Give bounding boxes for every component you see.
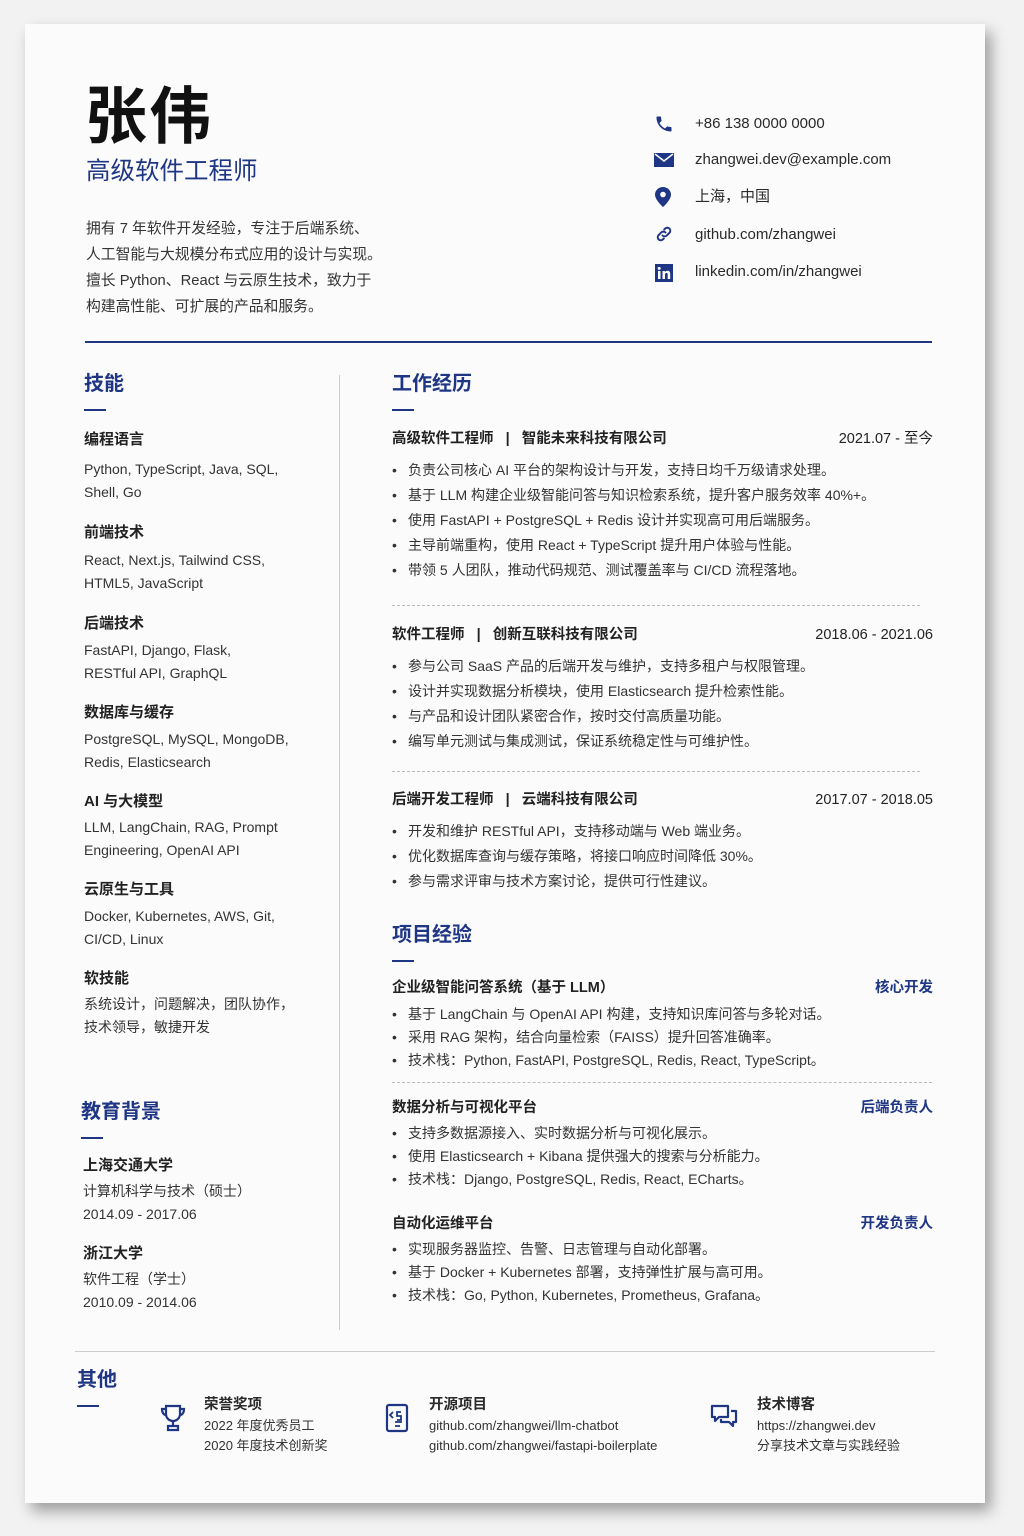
- panel: skills: HTML5, JavaScript: [84, 575, 203, 591]
- icon: trophy: [160, 1404, 186, 1432]
- panel: projects: 后端负责人: [860, 1100, 933, 1116]
- panel: education: 2014.09 - 2017.06: [83, 1206, 197, 1222]
- panel: projects: [392, 924, 933, 1303]
- panel: skills: 技术领导，敏捷开发: [84, 1019, 210, 1035]
- panel: skills: CI/CD, Linux: [84, 931, 163, 947]
- panel: skills: PostgreSQL, MySQL, MongoDB,: [84, 731, 289, 747]
- text: honors: [204, 1396, 328, 1453]
- panel: projects: 企业级智能问答系统（基于 LLM）: [392, 980, 614, 996]
- text: open source: [429, 1396, 657, 1453]
- panel: skills: LLM, LangChain, RAG, Prompt: [84, 819, 278, 835]
- panel: projects: 开发负责人: [860, 1216, 933, 1232]
- panel: education: 浙江大学: [83, 1245, 143, 1262]
- panel: work experience: [392, 372, 933, 889]
- panel: skills: Python, TypeScript, Java, SQL,: [84, 461, 278, 477]
- panel: work experience: 带领 5 人团队，推动代码规范、测试覆盖率与 CI/CD 流程落地。: [408, 562, 805, 578]
- contact list: zhangwei.dev@example.com: [695, 151, 891, 168]
- text: blog: 分享技术文章与实践经验: [757, 1438, 900, 1453]
- panel: projects: 技术栈：Go, Python, Kubernetes, Prometheus, Grafana。: [408, 1287, 769, 1303]
- panel: work experience: 优化数据库查询与缓存策略，将接口响应时间降低 30%。: [408, 848, 762, 864]
- heading: projects: 项目经验: [392, 924, 472, 946]
- contact list: github.com/zhangwei: [695, 226, 836, 243]
- panel: work experience: 开发和维护 RESTful API，支持移动端与 Web 端业务。: [408, 823, 750, 839]
- text: honors: 2022 年度优秀员工: [204, 1418, 315, 1433]
- panel: work experience: 主导前端重构，使用 React + TypeScript 提升用户体验与性能。: [408, 537, 800, 553]
- panel: skills: 编程语言: [84, 431, 144, 448]
- contact list: linkedin.com/in/zhangwei: [695, 263, 862, 280]
- text: blog: 技术博客: [757, 1397, 815, 1413]
- panel: skills: Shell, Go: [84, 484, 142, 500]
- panel: projects: 基于 Docker + Kubernetes 部署，支持弹性扩展与高可用。: [408, 1264, 772, 1280]
- heading: education: 教育背景: [81, 1101, 161, 1123]
- summary: [86, 220, 382, 315]
- panel: projects: 技术栈：Python, FastAPI, PostgreSQL, Redis, React, TypeScript。: [408, 1052, 825, 1068]
- panel: education: [81, 1100, 251, 1310]
- text: blog: [757, 1396, 900, 1453]
- text: open source: 开源项目: [429, 1397, 487, 1413]
- panel: skills: 云原生与工具: [84, 881, 174, 898]
- panel: projects: 核心开发: [875, 980, 933, 996]
- icon: mail: [654, 153, 674, 167]
- panel: others: [77, 1369, 900, 1453]
- panel: work experience: 编写单元测试与集成测试，保证系统稳定性与可维护性。: [408, 733, 758, 749]
- panel: skills: RESTful API, GraphQL: [84, 665, 227, 681]
- panel: education: 2010.09 - 2014.06: [83, 1294, 197, 1310]
- panel: work experience: 软件工程师 | 创新互联科技有限公司: [392, 627, 638, 643]
- job title: 高级软件工程师: [86, 158, 258, 185]
- panel: skills: 软技能: [84, 970, 129, 987]
- panel: skills: [84, 372, 294, 1035]
- panel: work experience: 与产品和设计团队紧密合作，按时交付高质量功能。: [408, 708, 730, 724]
- panel: work experience: 2018.06 - 2021.06: [815, 627, 933, 643]
- text: blog: https://zhangwei.dev: [757, 1418, 876, 1433]
- panel: skills: React, Next.js, Tailwind CSS,: [84, 552, 265, 568]
- panel: projects: 使用 Elasticsearch + Kibana 提供强大的搜索与分析能力。: [408, 1148, 769, 1164]
- icon: linkedin: [655, 264, 673, 282]
- panel: work experience: 设计并实现数据分析模块，使用 Elasticsearch 提升检索性能。: [408, 683, 793, 699]
- panel: projects: 技术栈：Django, PostgreSQL, Redis, React, ECharts。: [408, 1171, 753, 1187]
- panel: skills: Docker, Kubernetes, AWS, Git,: [84, 908, 275, 924]
- panel: skills: 后端技术: [84, 615, 144, 632]
- panel: work experience: 使用 FastAPI + PostgreSQL + Redis 设计并实现高可用后端服务。: [408, 512, 819, 528]
- panel: projects: 自动化运维平台: [392, 1216, 494, 1232]
- icon: pin: [655, 187, 671, 207]
- panel: skills: AI 与大模型: [84, 793, 163, 810]
- name: 张伟: [85, 83, 213, 152]
- panel: work experience: 参与需求评审与技术方案讨论，提供可行性建议。: [408, 873, 716, 889]
- icon: phone: [656, 116, 672, 132]
- panel: education: 计算机科学与技术（硕士）: [83, 1183, 251, 1199]
- contact list: 上海，中国: [695, 188, 770, 205]
- panel: work experience: 参与公司 SaaS 产品的后端开发与维护，支持多租户与权限管理。: [408, 658, 814, 674]
- panel: work experience: 2021.07 - 至今: [839, 431, 933, 447]
- icon: code doc: [386, 1404, 408, 1432]
- panel: projects: 实现服务器监控、告警、日志管理与自动化部署。: [408, 1241, 716, 1257]
- panel: skills: FastAPI, Django, Flask,: [84, 642, 231, 658]
- text: open source: github.com/zhangwei/llm-chatbot: [429, 1418, 618, 1433]
- panel: education: 软件工程（学士）: [83, 1271, 195, 1287]
- panel: projects: 基于 LangChain 与 OpenAI API 构建，支持知识库问答与多轮对话。: [408, 1006, 830, 1022]
- panel: skills: 系统设计，问题解决，团队协作，: [84, 996, 294, 1012]
- contact list: +86 138 0000 0000: [695, 115, 825, 132]
- panel: skills: Redis, Elasticsearch: [84, 754, 211, 770]
- summary: 拥有 7 年软件开发经验，专注于后端系统、: [86, 221, 369, 237]
- text: honors: 2020 年度技术创新奖: [204, 1438, 328, 1453]
- panel: skills: 前端技术: [84, 524, 144, 541]
- heading: work: 工作经历: [392, 373, 472, 395]
- panel: projects: 支持多数据源接入、实时数据分析与可视化展示。: [408, 1125, 716, 1141]
- panel: work experience: 2017.07 - 2018.05: [815, 792, 933, 808]
- panel: work experience: 基于 LLM 构建企业级智能问答与知识检索系统，提升客户服务效率 40%+。: [408, 487, 875, 503]
- panel: projects: 采用 RAG 架构，结合向量检索（FAISS）提升回答准确率。: [408, 1029, 780, 1045]
- panel: education: 上海交通大学: [83, 1157, 173, 1174]
- text: honors: 荣誉奖项: [204, 1397, 262, 1413]
- summary: 擅长 Python、React 与云原生技术，致力于: [86, 273, 371, 289]
- panel: work experience: 负责公司核心 AI 平台的架构设计与开发，支持日均千万级请求处理。: [408, 462, 835, 478]
- icon: chat: [710, 1404, 738, 1428]
- contact list: [654, 115, 891, 282]
- icon: link: [656, 226, 672, 242]
- panel: projects: 数据分析与可视化平台: [392, 1100, 537, 1116]
- text: open source: github.com/zhangwei/fastapi-boilerplate: [429, 1438, 657, 1453]
- panel: work experience: 后端开发工程师 | 云端科技有限公司: [392, 792, 638, 808]
- panel: skills: Engineering, OpenAI API: [84, 842, 240, 858]
- heading: others: 其他: [77, 1369, 117, 1391]
- heading: skills: 技能: [84, 373, 124, 395]
- panel: skills: 数据库与缓存: [84, 704, 174, 721]
- summary: 构建高性能、可扩展的产品和服务。: [86, 299, 323, 315]
- panel: work experience: 高级软件工程师 | 智能未来科技有限公司: [392, 431, 667, 447]
- summary: 人工智能与大规模分布式应用的设计与实现。: [86, 247, 382, 263]
